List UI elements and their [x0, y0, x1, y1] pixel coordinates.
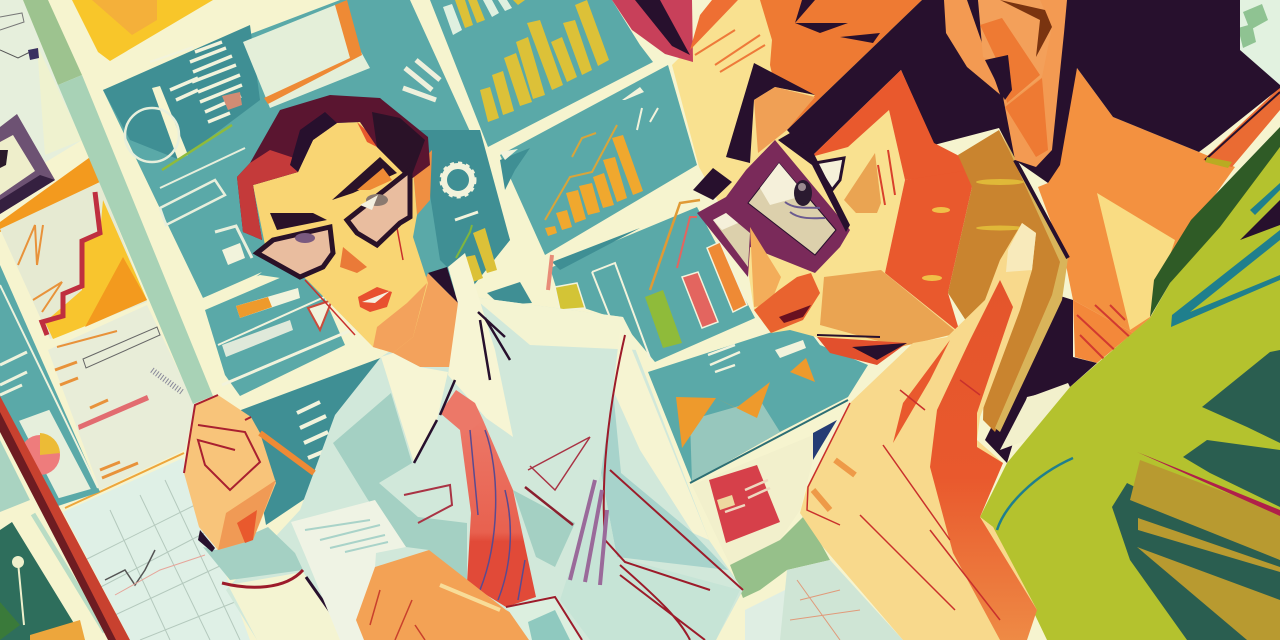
left person: left sleeve	[198, 527, 350, 640]
right person: ear	[944, 0, 1067, 167]
panel: lower teal mountain chart	[648, 322, 868, 483]
panel: report sheet	[48, 305, 195, 508]
right person: face base	[672, 0, 960, 347]
right person: nose	[750, 227, 820, 333]
right person: cheek and temple	[811, 70, 1068, 432]
right person: green shirt	[980, 127, 1280, 640]
panel: navy triangle	[813, 420, 837, 460]
left person: tie	[414, 380, 536, 607]
left person: neck	[393, 273, 458, 367]
right person: shirt collar	[1000, 383, 1070, 450]
right person: forehead	[760, 0, 922, 130]
panel: yellow top card	[72, 0, 213, 61]
paper bottom	[745, 560, 903, 640]
panel: main teal board	[103, 0, 510, 396]
left person: shirt	[226, 297, 743, 640]
right person: hair tuft	[612, 0, 765, 72]
panel: lower bars chart	[487, 200, 755, 362]
panel: top right corner sheet	[1230, 0, 1280, 90]
right person: hand	[800, 223, 1037, 640]
right person: neck	[1038, 68, 1280, 363]
panel: top bar chart	[430, 0, 653, 147]
panel: green lower sheet	[730, 515, 830, 598]
right person: mouth	[817, 335, 907, 365]
left person: paper	[291, 500, 406, 640]
left person: eyebrows	[270, 157, 397, 230]
board edge diagonal	[0, 396, 130, 640]
right person: eyebrow and hair spikes	[726, 0, 880, 163]
panel: middle bar chart	[500, 65, 697, 255]
panel: cream sheet with red card	[692, 435, 813, 565]
left person: ear	[413, 150, 432, 215]
left person: raised hand with pen	[184, 395, 314, 550]
left person: glasses	[257, 170, 410, 277]
panel: orange line chart card	[0, 155, 147, 339]
panel: framed icon	[0, 114, 55, 214]
panel: green chart lower left	[0, 522, 85, 640]
right person: hair	[787, 0, 1280, 183]
panel: grid paper lower left	[63, 458, 250, 640]
left person: face	[253, 122, 428, 353]
panel: left lower strip area	[0, 440, 105, 632]
panel: left teal sheet	[0, 265, 100, 506]
panel: far left top sheet	[0, 0, 82, 190]
panel: teal board beneath	[241, 357, 400, 525]
left person: hair	[237, 95, 430, 240]
left person: lower hand	[356, 550, 529, 640]
left person: collar	[381, 253, 513, 463]
right person: dark neck shadow	[985, 295, 1097, 463]
green frame strip	[23, 0, 213, 404]
right person: glasses	[693, 133, 850, 277]
left person: cuff	[506, 595, 582, 640]
